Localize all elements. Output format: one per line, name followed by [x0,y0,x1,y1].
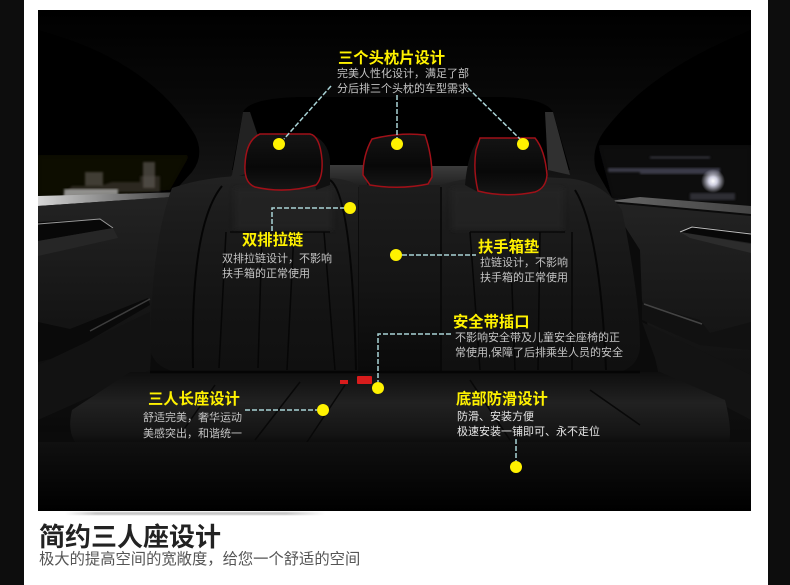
seat back centre armrest [359,200,440,294]
red seat belt buckles [340,376,372,384]
right marker [517,138,529,150]
marker [390,249,402,261]
marker [317,404,329,416]
heading: 底部防滑设计 [456,390,548,408]
description: 扶手箱的正常使用 [222,266,310,280]
leader line [378,334,451,382]
left marker [273,138,285,150]
left door handle [38,219,118,256]
heading: 三人长座设计 [148,390,240,408]
description: 分后排三个头枕的车型需求 [337,81,469,95]
description: 舒适完美，奢华运动 [143,410,242,424]
centre headrest [363,134,432,187]
leader line [402,254,476,256]
right window sill [610,197,751,214]
right side window [594,96,751,201]
callout: armrest pad [390,238,568,284]
callout: anti-slip bottom [456,390,600,473]
description: 常使用,保障了后排乘坐人员的安全 [455,345,623,359]
centre marker [391,138,403,150]
heading: 双排拉链 [242,231,303,249]
cushion front edge [38,442,751,511]
rear window [232,97,570,170]
parcel shelf [228,112,570,188]
panel: car interior photo with rear seat cover [38,10,751,511]
description: 防滑、安装方便 [457,409,534,423]
left door panel [38,198,168,334]
right door handle [680,226,751,253]
heading: 扶手箱垫 [478,238,540,256]
description: 双排拉链设计，不影响 [222,251,332,265]
right door armrest [644,303,702,324]
marker [510,461,522,473]
right door panel [618,204,751,354]
left black side bar [0,0,24,585]
description: 扶手箱的正常使用 [480,270,568,284]
description: 美感突出，和谐统一 [143,426,242,440]
leader lines [284,86,520,139]
right black side bar [768,0,790,585]
callout: double zipper [222,202,356,280]
seat back right [440,178,638,312]
marker [372,382,384,394]
callout: three headrests [273,49,529,150]
description: 完美人性化设计，满足了部 [337,66,469,80]
description: 极速安装一铺即可、永不走位 [457,424,600,438]
left side window [38,96,200,196]
leader line [245,409,317,411]
leader line [272,208,345,232]
roof lining [38,10,751,200]
left window sill [38,192,170,206]
title: 简约三人座设计 [39,522,221,552]
callout: three-person long seat [143,390,329,440]
description: 不影响安全带及儿童安全座椅的正 [455,330,620,344]
description: 拉链设计，不影响 [480,255,568,269]
callout: seat belt slot [372,313,623,394]
seat back left [155,176,358,312]
heading: 三个头枕片设计 [338,49,445,67]
subtitle: 极大的提高空间的宽敞度，给您一个舒适的空间 [39,551,360,568]
right headrest [465,138,547,195]
heading: 安全带插口 [453,313,530,331]
shadow line under photo [65,512,325,515]
left door armrest [38,298,150,353]
leader line [515,439,517,461]
seat cushion [70,371,730,436]
left headrest [245,134,330,190]
marker [344,202,356,214]
